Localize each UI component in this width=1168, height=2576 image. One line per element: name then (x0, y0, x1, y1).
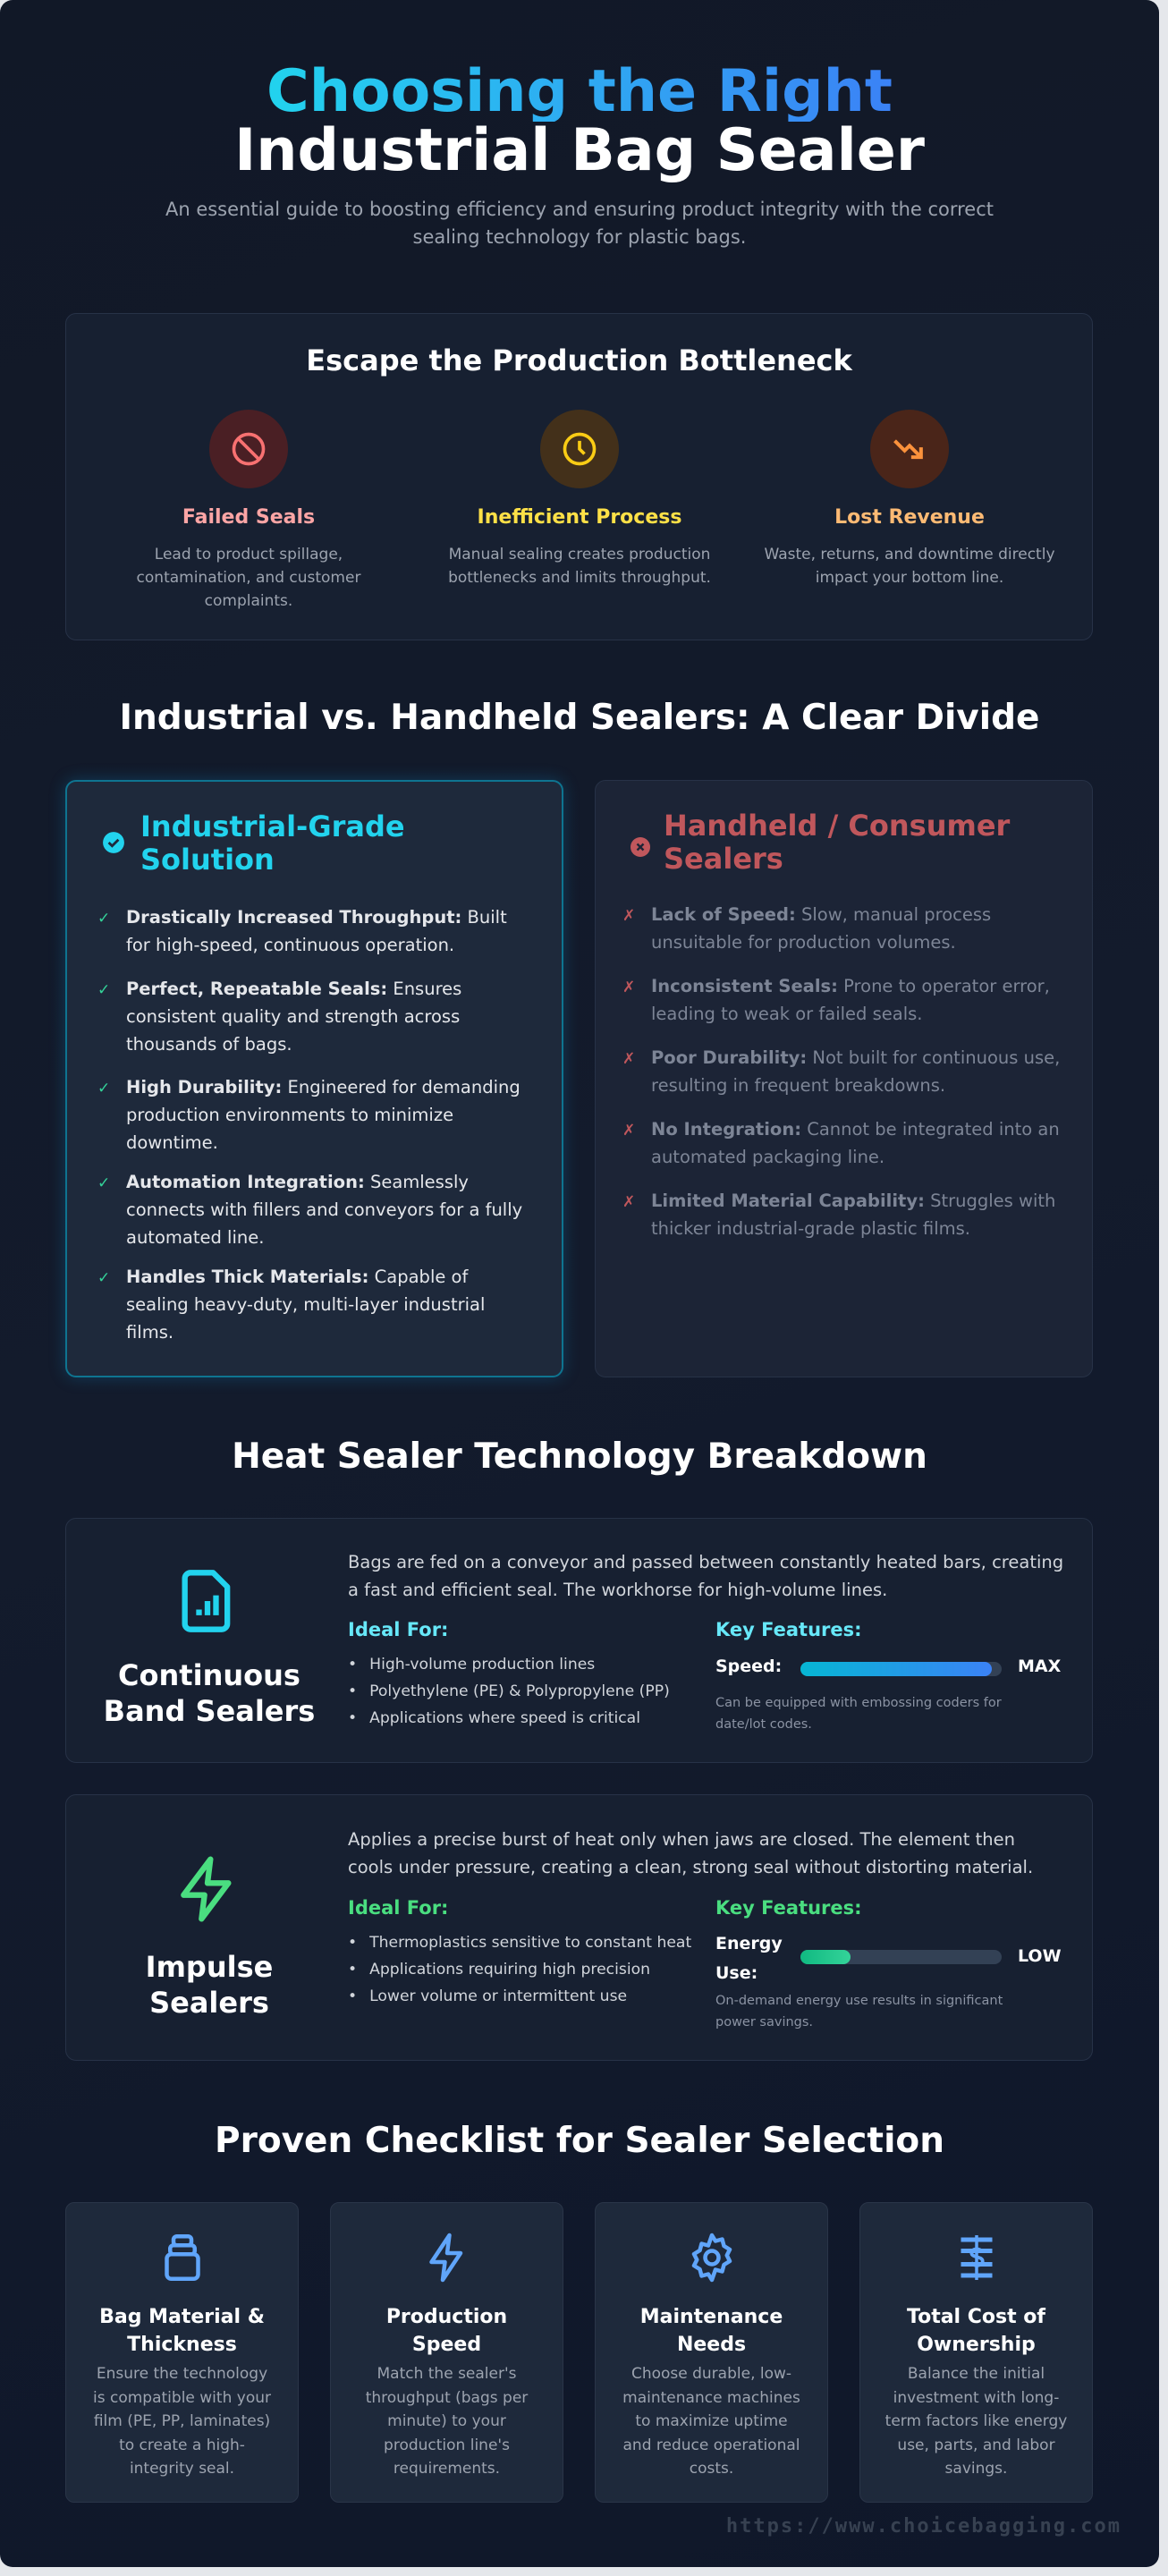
icon: x badge (631, 837, 650, 857)
card title: Solution (140, 843, 275, 877)
benefit list: ✓ (97, 910, 110, 928)
name (104, 1658, 315, 1728)
benefit list: Perfect, Repeatable Seals: Ensures consistent quality and strength across thousands of bags. (126, 979, 461, 1055)
problem: inefficient process: Inefficient Process (478, 506, 681, 529)
title (234, 58, 925, 184)
problem: inefficient process: bottlenecks and limits throughput. (448, 569, 711, 587)
ideal for: Ideal For: (348, 1897, 448, 1919)
icon: lightning (429, 2233, 463, 2283)
checklist: production speed: Speed (412, 2334, 481, 2356)
panel: continuous band sealers (65, 1518, 1093, 1763)
card title: Industrial-Grade (140, 809, 405, 843)
benefit list: Handles Thick Materials: Capable of sealing heavy-duty, multi-layer industrial films. (126, 1267, 485, 1343)
card title (664, 809, 1011, 876)
key features: energy bar: Key Features: (715, 1897, 862, 1919)
checklist: maintenance: Needs (677, 2334, 746, 2356)
checklist: maintenance (595, 2202, 828, 2503)
panel: continuous band sealers: Speed: (715, 1657, 782, 1676)
key features: energy bar (715, 1897, 1062, 2029)
panel: impulse sealers: LOW (1018, 1946, 1062, 1966)
ideal for: Ideal For: (348, 1619, 448, 1640)
card title: Sealers (664, 842, 783, 876)
problem: failed seals: contamination, and customer (137, 569, 360, 587)
icon: prohibited (209, 410, 288, 488)
subtitle: An essential guide to boosting efficiency and ensuring product integrity with the correct sealing technology for plastic bags. (165, 199, 994, 248)
problem: lost revenue: Waste, returns, and downtime directly (764, 546, 1055, 564)
panel: production bottleneck (65, 313, 1093, 640)
panel: impulse sealers: Lower volume or intermittent use (369, 1987, 627, 2005)
problem: lost revenue (764, 410, 1055, 587)
panel: continuous band sealers: MAX (1018, 1657, 1061, 1676)
panel: industrial-grade card (65, 780, 563, 1377)
card title (140, 809, 405, 877)
drawback list (622, 904, 1060, 1239)
title: Industrial Bag Sealer (234, 117, 925, 184)
key features: speed bar (715, 1619, 1061, 1732)
panel: handheld card (595, 780, 1093, 1377)
checklist: total cost (859, 2202, 1093, 2503)
checklist: bag material: Thickness (127, 2334, 237, 2356)
panel: impulse sealers (65, 1794, 1093, 2061)
drawback list: ✗ (622, 1050, 635, 1068)
checklist: bag material: Ensure the technology is compatible with your film (PE, PP, laminates) to create a high-integrity seal. (93, 2365, 271, 2478)
drawback list: No Integration: Cannot be integrated into an automated packaging line. (651, 1119, 1060, 1167)
problem: lost revenue: Lost Revenue (834, 506, 985, 529)
title: Choosing the Right (267, 58, 893, 125)
checklist: total cost: Ownership (917, 2334, 1036, 2356)
key features: speed bar: Key Features: (715, 1619, 862, 1640)
icon: check badge (103, 832, 124, 853)
section heading: industrial vs handheld: Industrial vs. Handheld Sealers: A Clear Divide (120, 698, 1039, 738)
benefit list (97, 907, 522, 1343)
checklist: bag material: Bag Material & (99, 2306, 265, 2328)
checklist: production speed: Production (386, 2306, 507, 2328)
benefit list: High Durability: Engineered for demanding production environments to minimize downtime. (126, 1077, 521, 1153)
problem: failed seals: Failed Seals (182, 506, 315, 529)
icon: document chart (182, 1570, 231, 1632)
checklist: production speed (330, 2202, 563, 2503)
panel: continuous band sealers: Applications where speed is critical (369, 1709, 640, 1727)
icon: gear (692, 2233, 732, 2283)
description: Applies a precise burst of heat only when jaws are closed. The element then cools under pressure, creating a clean, strong seal without distorting material. (348, 1829, 1033, 1877)
benefit list: ✓ (97, 1080, 110, 1097)
drawback list: ✗ (622, 1193, 635, 1211)
panel: impulse sealers: On-demand energy use results in significant power savings. (715, 1994, 1003, 2029)
benefit list: Automation Integration: Seamlessly connects with fillers and conveyors for a fully automated line. (126, 1172, 522, 1248)
drawback list: ✗ (622, 907, 635, 925)
panel: impulse sealers: Energy (715, 1934, 783, 1953)
problem: lost revenue: impact your bottom line. (816, 569, 1003, 587)
card title: Handheld / Consumer (664, 809, 1010, 843)
checklist: total cost: Balance the initial investment with long-term factors like energy use, parts, and labor savings. (885, 2365, 1067, 2478)
name: Continuous (118, 1658, 300, 1692)
panel: continuous band sealers: High-volume production lines (369, 1656, 595, 1674)
checklist: bag material (65, 2202, 299, 2503)
problem: failed seals (137, 410, 361, 610)
benefit list: Drastically Increased Throughput: Built for high-speed, continuous operation. (126, 907, 507, 955)
panel: continuous band sealers: Can be equipped with embossing coders for date/lot codes. (715, 1696, 1002, 1732)
drawback list: Inconsistent Seals: Prone to operator error, leading to weak or failed seals. (651, 976, 1050, 1024)
problem: inefficient process: Manual sealing creates production (449, 546, 710, 564)
footer url: https://www.choicebagging.com (726, 2515, 1121, 2538)
checklist: production speed: Match the sealer's throughput (bags per minute) to your production line's requirements. (366, 2365, 528, 2478)
panel: impulse sealers: Use: (715, 1963, 758, 1983)
drawback list: ✗ (622, 1122, 635, 1140)
problem: failed seals: Lead to product spillage, (155, 546, 343, 564)
icon: clock (540, 410, 619, 488)
drawback list: Poor Durability: Not built for continuous use, resulting in frequent breakdowns. (651, 1047, 1060, 1096)
checklist: maintenance: Choose durable, low-maintenance machines to maximize uptime and reduce operational costs. (622, 2365, 800, 2478)
panel: impulse sealers: Thermoplastics sensitive to constant heat (369, 1934, 691, 1952)
section heading: technology breakdown: Heat Sealer Technology Breakdown (232, 1436, 927, 1477)
checklist: total cost: Total Cost of (907, 2306, 1045, 2328)
benefit list: ✓ (97, 1269, 110, 1287)
name: Impulse (146, 1950, 273, 1984)
panel: continuous band sealers: Polyethylene (PE) & Polypropylene (PP) (369, 1682, 670, 1700)
benefit list: ✓ (97, 981, 110, 999)
problem: failed seals: complaints. (205, 592, 292, 610)
problem: inefficient process (448, 410, 711, 587)
drawback list: ✗ (622, 979, 635, 996)
name (146, 1950, 273, 2020)
panel heading: Escape the Production Bottleneck (306, 343, 852, 377)
description: Bags are fed on a conveyor and passed between constantly heated bars, creating a fast and efficient seal. The workhorse for high-volume lines. (348, 1552, 1063, 1600)
checklist: maintenance: Maintenance (640, 2306, 783, 2328)
icon: container (165, 2234, 200, 2281)
name: Sealers (149, 1986, 269, 2020)
icon: dollar bars (961, 2235, 993, 2280)
icon: lightning (181, 1857, 231, 1921)
panel: impulse sealers: Applications requiring high precision (369, 1961, 650, 1979)
drawback list: Limited Material Capability: Struggles with thicker industrial-grade plastic films. (651, 1191, 1055, 1239)
benefit list: ✓ (97, 1174, 110, 1192)
name: Band Sealers (104, 1694, 315, 1728)
icon: trend down (870, 410, 949, 488)
section heading: checklist: Proven Checklist for Sealer Selection (215, 2121, 944, 2161)
drawback list: Lack of Speed: Slow, manual process unsuitable for production volumes. (651, 904, 991, 953)
